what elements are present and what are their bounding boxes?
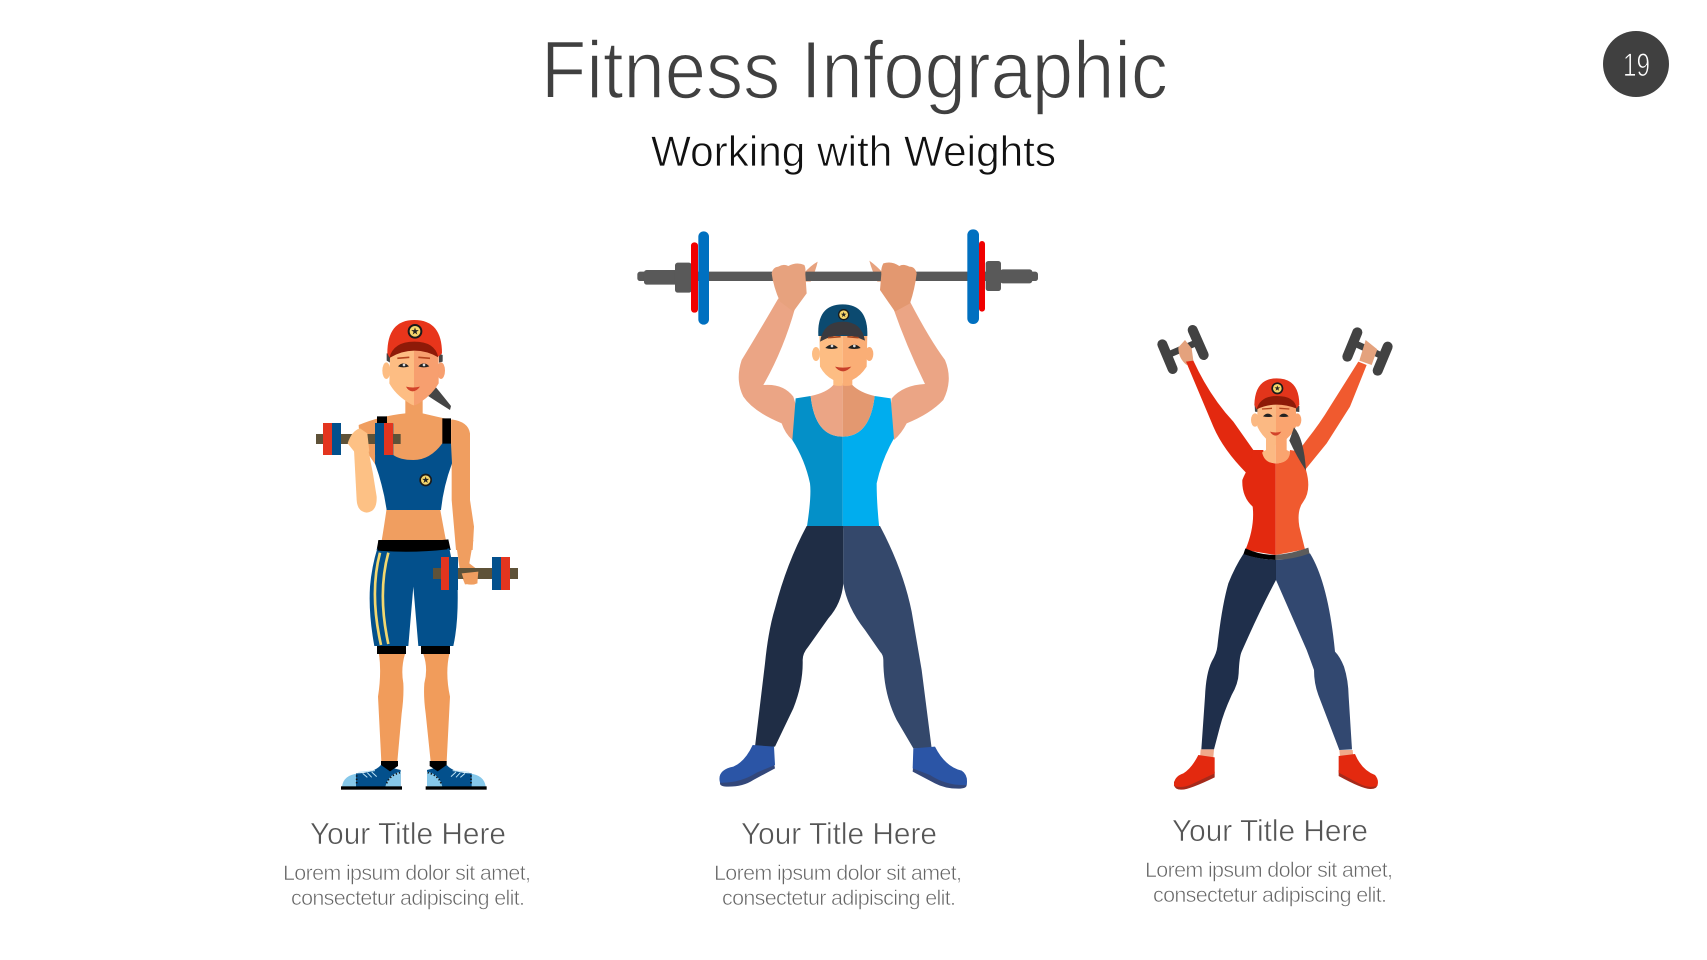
chest bbox=[811, 383, 875, 437]
right shoe bbox=[426, 761, 487, 790]
tank top bbox=[792, 396, 894, 528]
shorts cuffs bbox=[377, 646, 450, 654]
column 3 body: consectetur adipiscing elit. bbox=[1153, 883, 1387, 907]
face bbox=[1257, 403, 1296, 445]
ears bbox=[812, 347, 873, 361]
belt bbox=[1243, 548, 1310, 560]
right sleeve bbox=[1297, 362, 1367, 470]
raised forearm bbox=[354, 450, 377, 513]
neck bbox=[1262, 438, 1290, 463]
chest star badge bbox=[419, 474, 432, 486]
left dumbbell bbox=[1162, 330, 1204, 369]
right arm bbox=[889, 302, 949, 440]
left leg bbox=[755, 526, 843, 747]
right hand bbox=[880, 262, 917, 312]
column 1 body: consectetur adipiscing elit. bbox=[291, 886, 525, 910]
shorts stripes bbox=[375, 553, 388, 645]
column 1 body bbox=[283, 861, 531, 910]
cap bbox=[387, 320, 442, 358]
lower dumbbell bbox=[433, 557, 518, 590]
fist bbox=[348, 428, 369, 453]
figure: woman with dumbbells at her sides bbox=[316, 320, 518, 790]
barbell bbox=[637, 229, 1038, 325]
figure: woman raising dumbbells bbox=[1162, 330, 1388, 790]
figure: man lifting barbell bbox=[637, 229, 1038, 789]
caption: column 2 bbox=[714, 816, 962, 910]
caption: column 3 bbox=[1145, 813, 1393, 907]
hair sides bbox=[1255, 405, 1299, 412]
left hand bbox=[772, 264, 807, 312]
upper dumbbell bbox=[316, 423, 401, 455]
straps bbox=[377, 416, 451, 444]
right shoe bbox=[913, 747, 967, 789]
cap bbox=[818, 304, 867, 342]
facial features bbox=[397, 357, 430, 391]
page number badge: 19 bbox=[1623, 47, 1650, 83]
lower arm bbox=[456, 540, 478, 584]
right shoe bbox=[1339, 754, 1378, 789]
waistband bbox=[377, 539, 451, 550]
face bbox=[389, 349, 439, 405]
page number badge bbox=[1603, 31, 1669, 97]
column 3 body bbox=[1145, 858, 1393, 907]
right leg bbox=[843, 526, 932, 748]
waistband lower bbox=[378, 540, 448, 552]
column 2 body: consectetur adipiscing elit. bbox=[722, 886, 956, 910]
column 3 title: Your Title Here bbox=[1172, 813, 1368, 848]
far arm bbox=[452, 419, 474, 550]
right legging bbox=[1276, 553, 1352, 750]
thumbs bbox=[804, 261, 883, 282]
tank top bbox=[375, 423, 452, 510]
title: Fitness Infographic bbox=[541, 25, 1168, 116]
ponytail bbox=[1289, 427, 1306, 471]
torso skin bbox=[359, 400, 452, 467]
facial features bbox=[1262, 408, 1289, 436]
left shoe bbox=[1174, 755, 1215, 790]
right dumbbell bbox=[1347, 332, 1388, 371]
ankles bbox=[1200, 749, 1353, 757]
column 1 body: Lorem ipsum dolor sit amet, bbox=[283, 861, 531, 885]
ears bbox=[1251, 413, 1301, 427]
abdomen bbox=[382, 508, 446, 541]
left legging bbox=[1201, 554, 1276, 749]
column 2 body bbox=[714, 861, 962, 910]
column 2 body: Lorem ipsum dolor sit amet, bbox=[714, 861, 962, 885]
torso bbox=[1242, 450, 1308, 555]
column 2 title: Your Title Here bbox=[741, 816, 937, 851]
cap bbox=[1254, 378, 1299, 409]
left shoe bbox=[719, 745, 775, 787]
column 3 body: Lorem ipsum dolor sit amet, bbox=[1145, 858, 1393, 882]
legs bbox=[378, 654, 450, 762]
caption: column 1 bbox=[283, 816, 531, 910]
left arm bbox=[739, 298, 797, 440]
hands bbox=[1178, 340, 1377, 365]
facial features bbox=[825, 337, 861, 371]
column 1 title: Your Title Here bbox=[310, 816, 506, 851]
shorts bbox=[370, 548, 458, 646]
ears bbox=[382, 362, 445, 379]
gripping hand bbox=[462, 572, 478, 585]
hair sides bbox=[387, 353, 443, 363]
face and neck bbox=[819, 333, 867, 386]
ponytail bbox=[427, 387, 451, 410]
subtitle: Working with Weights bbox=[651, 128, 1056, 176]
left sleeve bbox=[1186, 361, 1262, 473]
left shoe bbox=[341, 761, 402, 790]
